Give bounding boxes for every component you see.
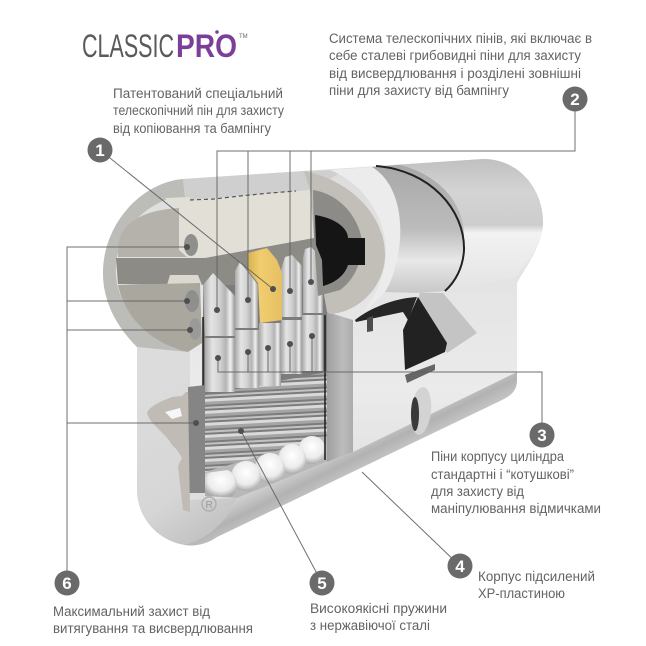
leader: callout 6 bbox=[67, 247, 196, 575]
callout 3 text: для захисту від bbox=[431, 484, 524, 499]
callout 2 text: себе сталеві грибовидні піни для захисту bbox=[329, 48, 581, 63]
plug end disc bbox=[304, 171, 385, 314]
callout 5 text bbox=[310, 601, 447, 633]
badge 3: 3 bbox=[537, 426, 547, 445]
callout 4 text bbox=[478, 569, 595, 601]
leader: callout 5 bbox=[241, 431, 322, 583]
callout 6 text bbox=[53, 604, 253, 636]
leader lines and anchor dots bbox=[67, 110, 575, 583]
black cam bbox=[403, 297, 447, 370]
right cylinder half bbox=[380, 159, 543, 291]
bottom spring balls bbox=[205, 436, 326, 497]
logo: ClassicPro: PRO bbox=[176, 28, 237, 64]
callout 2 text bbox=[329, 31, 592, 98]
top surface of plug bbox=[183, 170, 345, 200]
callout 2 text: піни для захисту від бампінгу bbox=[329, 83, 509, 98]
badge 2: 2 bbox=[570, 90, 580, 109]
badge 6 bbox=[54, 570, 80, 596]
lower housing bevel bbox=[185, 372, 517, 545]
badge 3 bbox=[530, 422, 554, 448]
upper pin holes bbox=[184, 234, 201, 340]
gold telescopic pin bbox=[248, 248, 282, 323]
badge 1 bbox=[88, 138, 112, 162]
dark tab bbox=[367, 316, 373, 332]
callout 5 text: з нержавіючої сталі bbox=[310, 618, 430, 633]
interior background bbox=[203, 285, 327, 400]
callout 2 text: від висвердлювання і розділені зовнішні bbox=[329, 66, 581, 81]
lower tan shell section bbox=[118, 283, 202, 352]
badge 5 bbox=[310, 570, 334, 596]
leader: callout 3 bbox=[218, 336, 542, 425]
registered mark: R bbox=[206, 500, 213, 511]
callout 4 text: Корпус підсилений bbox=[478, 569, 595, 584]
cylinder body silhouette bbox=[103, 159, 543, 545]
registered mark bbox=[202, 497, 216, 511]
callout 1 text bbox=[113, 86, 284, 136]
black keyway hole bbox=[315, 215, 365, 286]
chrome cam bbox=[418, 293, 477, 353]
side retaining bar bbox=[188, 385, 205, 493]
callout 3 text: маніпулювання відмичками bbox=[431, 501, 601, 516]
callout 5 text: Високоякісні пружини bbox=[310, 601, 447, 616]
rim of left cut face bbox=[103, 179, 188, 352]
second chrome ring bbox=[372, 165, 464, 293]
black chamber lines bbox=[203, 315, 325, 460]
logo: ClassicPro: CLASSIC bbox=[82, 28, 174, 64]
leader: callout 2 bbox=[217, 110, 575, 310]
key hole in profile bbox=[165, 408, 182, 419]
cylinder lock cutaway illustration bbox=[103, 159, 543, 545]
callout 4 text: ХР-пластиною bbox=[478, 586, 565, 601]
callout 6 text: витягування та висвердлювання bbox=[53, 621, 253, 636]
retaining screw hole bbox=[409, 386, 433, 436]
plug serrations bbox=[190, 191, 296, 200]
floor of cut bbox=[205, 436, 327, 498]
cream plug bbox=[165, 190, 314, 258]
lower left body face bbox=[137, 347, 237, 545]
ledge bbox=[167, 275, 202, 285]
badge 6: 6 bbox=[62, 574, 72, 593]
plug chrome ring bbox=[330, 167, 400, 320]
logo: ClassicPro: TM bbox=[239, 34, 248, 40]
anchor dots bbox=[184, 244, 315, 434]
ring dark groove bbox=[376, 166, 464, 291]
lower pins bbox=[205, 315, 323, 392]
badge 4 bbox=[448, 554, 472, 578]
leader: callout 1 bbox=[100, 150, 273, 289]
callout 1 text: Патентований спеціальний bbox=[113, 86, 283, 101]
callout 3 text: стандартні і “котушкові” bbox=[431, 467, 574, 482]
upper pins bbox=[203, 247, 323, 336]
keyway gap bbox=[116, 238, 330, 320]
callout 1 text: телескопічний пін для захисту bbox=[113, 103, 284, 118]
callout 1 text: від копіювання та бампінгу bbox=[113, 121, 271, 136]
badge 5: 5 bbox=[317, 574, 327, 593]
badge 2 bbox=[562, 86, 588, 112]
dark annulus around hole bbox=[313, 190, 362, 296]
right interior wall bbox=[327, 312, 353, 462]
badge 4: 4 bbox=[455, 557, 465, 576]
upper tan shell section bbox=[118, 208, 187, 257]
leader: callout 4 bbox=[362, 472, 460, 566]
callout 3 text bbox=[431, 449, 601, 516]
dark crescent above panel bbox=[355, 297, 417, 322]
cam lower sliver bbox=[405, 364, 435, 383]
callout 3 text: Піни корпусу циліндра bbox=[431, 449, 564, 464]
spring stack bbox=[205, 372, 327, 478]
badge 1: 1 bbox=[95, 141, 105, 160]
key profile cut-out bbox=[147, 392, 190, 512]
callout 2 text: Система телескопічних пінів, які включає в bbox=[329, 31, 592, 46]
callout 6 text: Максимальний захист від bbox=[53, 604, 210, 619]
